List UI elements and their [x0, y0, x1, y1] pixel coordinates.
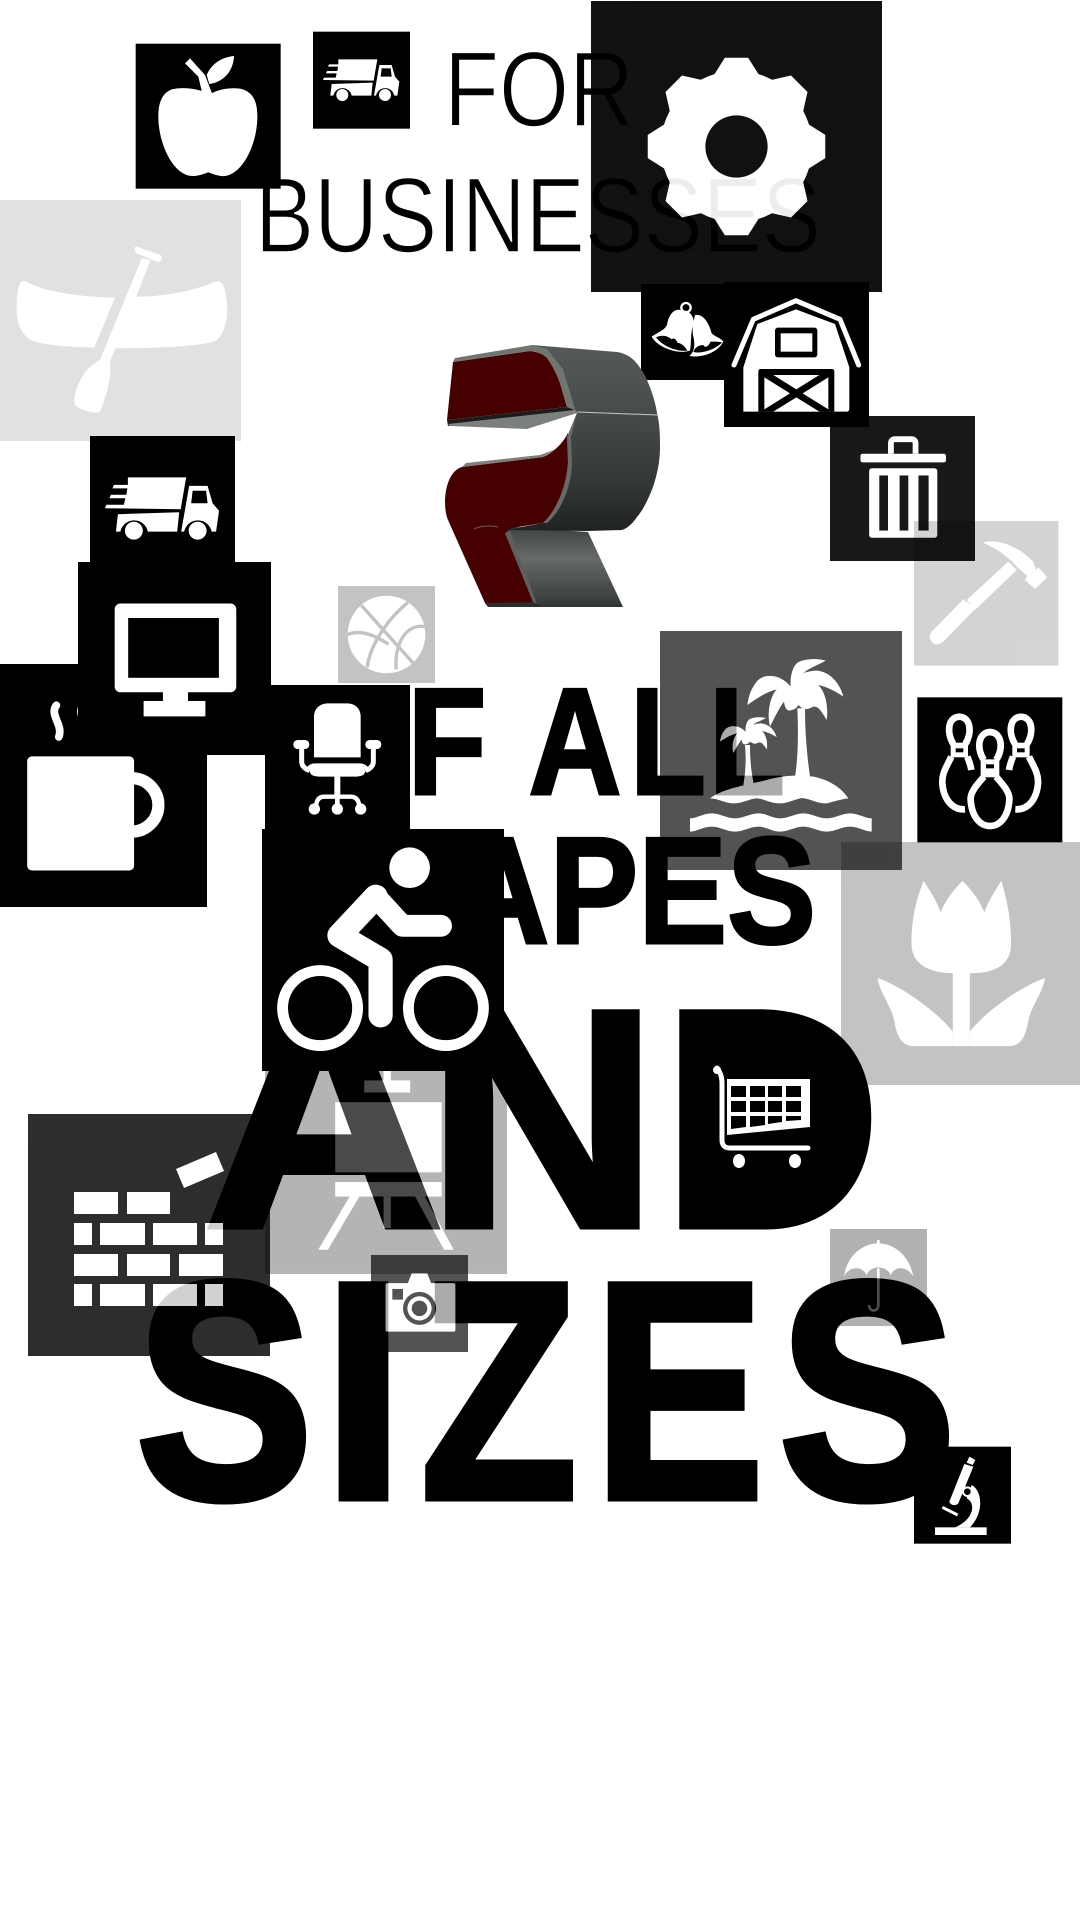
icon: microscope — [914, 1447, 1011, 1544]
heading: and sizes: Z — [420, 1217, 578, 1564]
icon: basketball — [338, 586, 435, 683]
icon: office chair — [265, 685, 410, 830]
icon: barn — [724, 282, 869, 427]
heading: of all shapes — [268, 657, 816, 976]
icon: delivery truck — [90, 436, 235, 581]
icon: cyclist — [262, 829, 504, 1071]
icon: palm island — [660, 631, 902, 870]
icon: gear — [591, 1, 882, 292]
icon: brick wall — [28, 1114, 270, 1356]
heading: of all shapes: A — [528, 657, 622, 827]
icon: umbrella — [830, 1229, 927, 1326]
heading: of all shapes: L — [709, 657, 785, 827]
heading: and sizes: E — [594, 1217, 764, 1564]
icon: delivery truck small — [313, 32, 410, 129]
heading: and sizes: D — [662, 945, 880, 1292]
heading: for businesses: BUSINESSES — [255, 155, 821, 275]
heading: of all shapes: O — [300, 657, 400, 827]
heading: of all shapes: L — [630, 657, 706, 827]
icon: camera — [371, 1255, 468, 1352]
logo: 3D red and grey mark — [445, 345, 660, 607]
heading: and sizes: S — [136, 1217, 314, 1564]
icon: apple — [136, 44, 281, 189]
icon: trash can — [830, 416, 975, 561]
heading: of all shapes: SHAPES — [268, 806, 816, 976]
icon: canoe — [0, 200, 241, 441]
icon: hammer — [914, 521, 1058, 666]
heading: of all shapes: F — [408, 657, 486, 827]
heading: and sizes: N — [428, 945, 658, 1292]
icon: monitor — [78, 562, 271, 755]
icon: shopping cart — [700, 1040, 840, 1200]
heading: for businesses: FOR — [444, 29, 634, 149]
heading: and sizes: I — [322, 1217, 405, 1564]
icon: tulip — [841, 842, 1080, 1085]
icon: bowling pins — [917, 697, 1062, 842]
heading: and sizes: S — [778, 1217, 956, 1564]
icon: coffee mug — [0, 664, 207, 907]
icon: easel — [265, 1032, 507, 1274]
heading: and sizes — [136, 945, 956, 1564]
heading: for businesses — [255, 29, 821, 275]
heading: and sizes: A — [204, 945, 444, 1292]
icon: bells — [641, 284, 738, 380]
